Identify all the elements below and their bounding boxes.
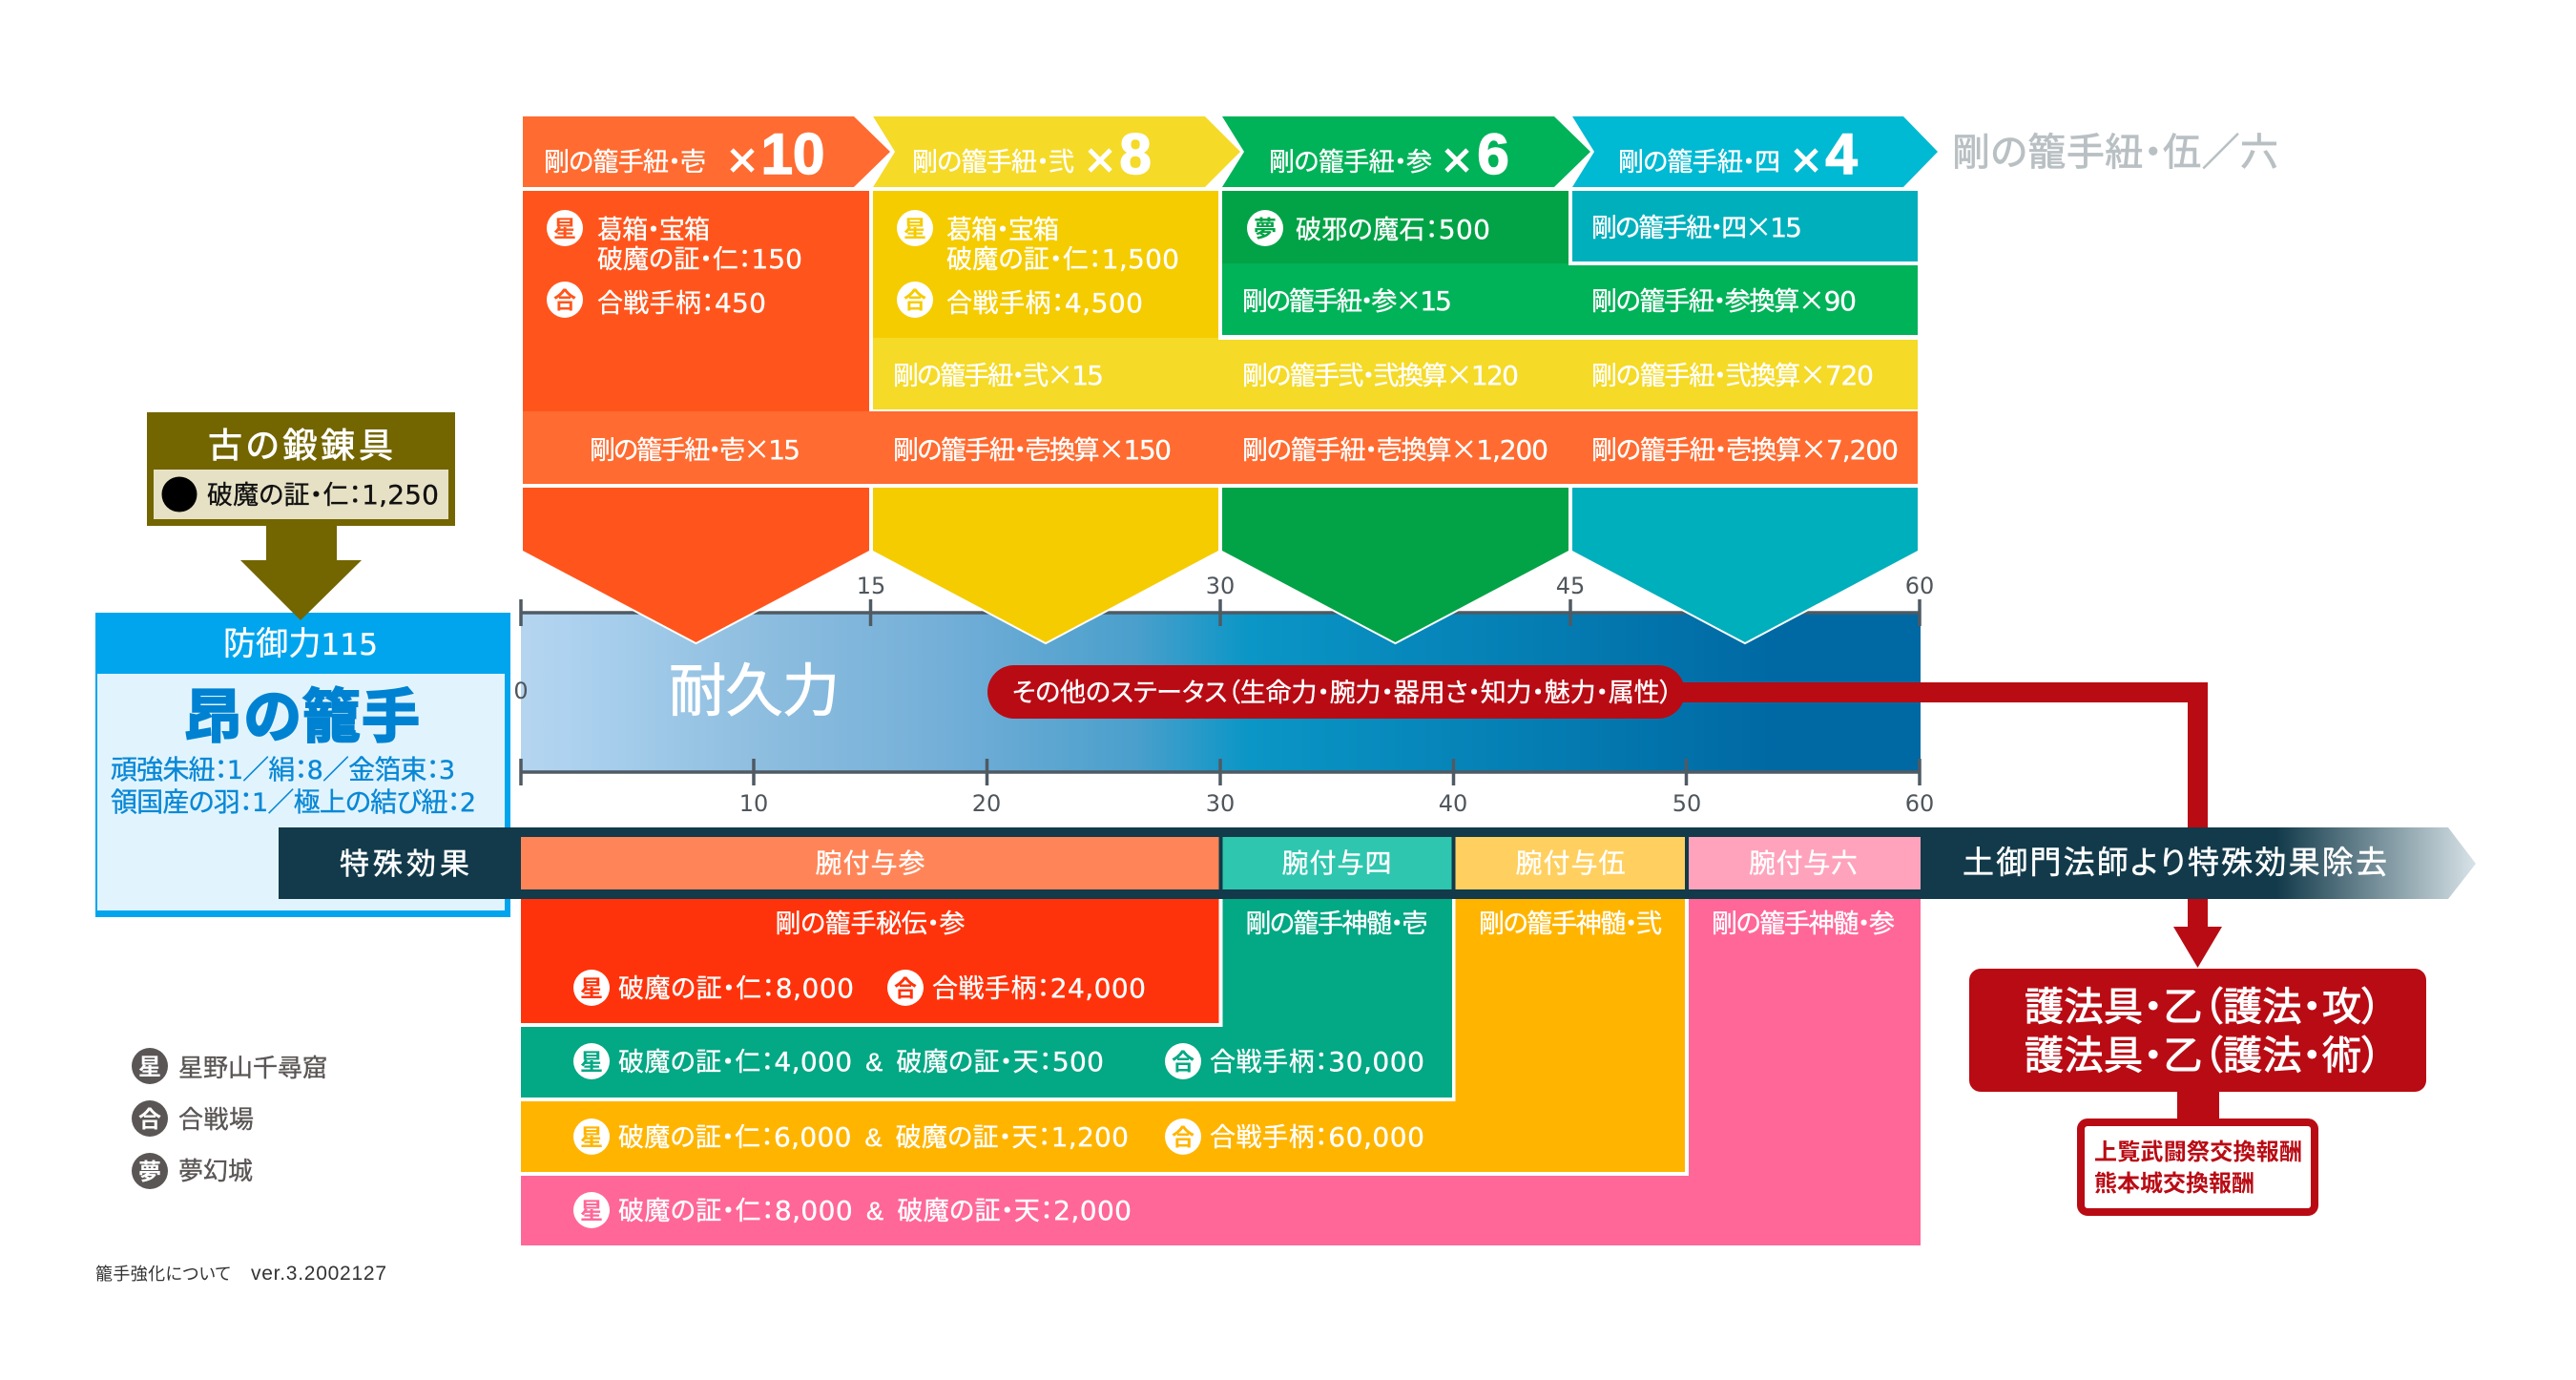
connector: to reward box — [2177, 1092, 2219, 1120]
icon: 合 — [897, 282, 933, 318]
row: 弐 conversions — [873, 338, 1918, 409]
icon: 夢 — [1247, 210, 1283, 246]
row: 参 conversions: 剛の籠手紐・参×15 — [1242, 281, 1452, 319]
cell: 腕付与伍: 腕付与伍 — [1515, 848, 1626, 878]
cost text: 合戦手柄：60,000 — [1210, 1121, 1424, 1153]
panel: 護法具・乙: 護法具・乙（護法・攻） — [2025, 985, 2381, 1029]
header arrow: 壱 ×10: 剛の籠手紐・壱 — [544, 148, 706, 177]
row: 壱 conversions — [523, 411, 1918, 484]
cell: 腕付与参: 腕付与参 — [815, 848, 925, 878]
icon: black circle — [162, 477, 197, 512]
bottom axis 10-60 — [521, 759, 1920, 785]
legend: 星野山千尋窟: 星 — [138, 1055, 161, 1080]
panel: red 秘伝・参 — [521, 899, 1219, 1023]
header arrow: 壱 ×10: 10 — [761, 122, 824, 186]
axis label 15: 15 — [857, 573, 885, 599]
heading: 剛の籠手紐 伍/六: 剛の籠手紐・伍／六 — [1952, 132, 2278, 174]
pill: other status — [987, 665, 1685, 719]
legend: 合戦場: 合戦場 — [178, 1105, 254, 1134]
chart: durability gradient bar — [513, 573, 1934, 817]
icon: 星 — [573, 1119, 610, 1155]
cost text: 合戦手柄：24,000 — [932, 972, 1146, 1004]
axis label 45: 45 — [1556, 573, 1585, 599]
text: 破邪の魔石 500: 破邪の魔石：500 — [1296, 214, 1490, 245]
icon: 夢: 夢 — [1254, 217, 1277, 242]
header arrow: 弐 ×8 — [855, 116, 1240, 189]
axis label 10: 10 — [739, 790, 768, 817]
materials line 2: 領国産の羽：1／極上の結び紐：2 — [111, 787, 476, 818]
chevron: 壱 — [523, 488, 869, 642]
header arrow: 参 ×6 — [1222, 116, 1590, 189]
row: 弐 conversions: 剛の籠手紐・弐換算×720 — [1591, 355, 1874, 393]
panel: rewards — [2081, 1122, 2315, 1212]
cost text: 破魔の証・仁：1,250 — [207, 479, 439, 511]
panel: 壱 sources — [523, 191, 869, 412]
icon: 合: 合 — [904, 288, 926, 314]
row: 壱 conversions: 剛の籠手紐・壱換算×1,200 — [1242, 429, 1548, 468]
cost text: 合戦手柄：30,000 — [1210, 1046, 1424, 1077]
icon: 合: 合 — [553, 288, 576, 314]
axis label 20: 20 — [972, 790, 1001, 817]
row: 参 conversions: 剛の籠手紐・参換算×90 — [1591, 281, 1857, 319]
icon: 星 — [897, 210, 933, 246]
header arrow: 参 ×6: × — [1442, 132, 1472, 189]
band: 特殊効果 — [279, 827, 2476, 899]
panel: 四 ×15 — [1572, 191, 1918, 261]
axis label 60: 60 — [1905, 573, 1934, 599]
icon: 星 — [573, 1043, 610, 1079]
panel: 護法具・乙: 護法具・乙（護法・術） — [2025, 1034, 2381, 1077]
chevron: 四 — [1572, 488, 1918, 642]
cell: 腕付与六 — [1689, 837, 1921, 889]
icon: 星: 星 — [553, 217, 576, 242]
cell: 腕付与四 — [1223, 837, 1452, 889]
header arrow: 弐 ×8: × — [1085, 132, 1115, 189]
legend: 夢幻城 — [132, 1153, 253, 1189]
text: 合戦手柄 450: 合戦手柄：450 — [597, 287, 766, 319]
header arrow: 参 ×6: 6 — [1477, 122, 1509, 186]
panel: amber 神髄・弐: 剛の籠手神髄・弐 — [1479, 910, 1662, 938]
panel: red 秘伝・参: 剛の籠手秘伝・参 — [775, 910, 966, 938]
icon: 合: 合 — [894, 976, 917, 1002]
axis label 50: 50 — [1672, 790, 1701, 817]
icon: 星 — [573, 970, 610, 1006]
icon: 合 — [1165, 1043, 1201, 1079]
header arrow: 四 ×4: 4 — [1825, 122, 1858, 186]
panel: teal 神髄・壱: 剛の籠手神髄・壱 — [1246, 910, 1427, 938]
top axis 0-60 — [521, 599, 1920, 626]
icon: 星: 星 — [580, 1199, 603, 1224]
row: 弐 conversions: 剛の籠手弐・弐換算×120 — [1242, 355, 1519, 393]
label: 耐久力: 耐久力 — [669, 659, 840, 723]
legend: 夢幻城: 夢幻城 — [178, 1157, 253, 1185]
panel: 昂の籠手 — [95, 613, 510, 917]
icon: 星: 星 — [580, 1050, 603, 1076]
text: 破魔の証・仁 1,500: 破魔の証・仁：1,500 — [946, 243, 1179, 275]
arrow: red connector to 護法具 — [1679, 682, 2222, 968]
cost text: 破魔の証・仁：6,000 & 破魔の証・天：1,200 — [618, 1121, 1129, 1153]
axis label 0: 0 — [513, 678, 529, 704]
chevron: 弐 — [873, 488, 1218, 642]
panel: 古の鍛錬具: 古の鍛錬具 — [208, 426, 393, 465]
icon: 星 — [573, 1192, 610, 1228]
panel: 護法具・乙 — [1969, 969, 2426, 1092]
arrow: olive down arrow — [240, 520, 362, 620]
footer: version: ver.3.2002127 — [251, 1263, 386, 1285]
panel: amber 神髄・弐 — [521, 899, 1685, 1172]
cell: 腕付与参 — [521, 837, 1219, 889]
row: 壱 conversions: 剛の籠手紐・壱×15 — [590, 429, 800, 468]
label: 土御門法師より特殊効果除去: 土御門法師より特殊効果除去 — [1963, 845, 2387, 880]
text: 破魔の証・仁 150: 破魔の証・仁：150 — [597, 243, 802, 275]
header arrow: 弐 ×8: 8 — [1119, 122, 1152, 186]
icon: 星: 星 — [580, 976, 603, 1002]
text: 合戦手柄 4,500: 合戦手柄：4,500 — [946, 287, 1143, 319]
cell: 腕付与四: 腕付与四 — [1282, 848, 1391, 878]
row: 弐 conversions: 剛の籠手紐・弐×15 — [893, 355, 1104, 393]
row: 壱 conversions: 剛の籠手紐・壱換算×150 — [893, 429, 1172, 468]
footer: version: 籠手強化について — [95, 1265, 231, 1284]
icon: 合: 合 — [1172, 1050, 1195, 1076]
panel: rewards: 上覧武闘祭交換報酬 — [2094, 1140, 2302, 1165]
axis label 30: 30 — [1206, 573, 1235, 599]
header arrow: 参 ×6: 剛の籠手紐・参 — [1269, 148, 1432, 177]
panel: pink 神髄・参 — [521, 899, 1921, 1245]
icon: 星 — [547, 210, 583, 246]
panel: rewards: 熊本城交換報酬 — [2094, 1170, 2254, 1197]
pill: other status: その他のステータス（生命力・腕力・器用さ・知力・魅力・属性） — [1012, 679, 1672, 707]
panel: 四 ×15: 剛の籠手紐・四×15 — [1591, 207, 1802, 245]
footer: version — [95, 1263, 386, 1285]
cost text: 破魔の証・仁：8,000 & 破魔の証・天：2,000 — [618, 1195, 1132, 1226]
legend: 星野山千尋窟: 星野山千尋窟 — [178, 1054, 327, 1082]
label: 特殊効果: 特殊効果 — [340, 847, 469, 881]
cost text: 破魔の証・仁：4,000 & 破魔の証・天：500 — [618, 1046, 1104, 1077]
header arrow: 壱 ×10: × — [727, 132, 758, 189]
icon: 星: 星 — [904, 217, 926, 242]
cell: 腕付与伍 — [1456, 837, 1685, 889]
panel: pink 神髄・参: 剛の籠手神髄・参 — [1712, 910, 1895, 938]
icon: 合 — [887, 970, 924, 1006]
text: 防御力115: 防御力115 — [223, 626, 378, 662]
icon: 合: 合 — [1172, 1125, 1195, 1151]
cost text: 破魔の証・仁：8,000 — [618, 972, 854, 1004]
row: 壱 conversions: 剛の籠手紐・壱換算×7,200 — [1591, 429, 1899, 468]
panel: 参 sources — [1222, 191, 1568, 264]
materials line 1: 頑強朱紐：1／絹：8／金箔束：3 — [111, 755, 455, 785]
icon: 合 — [1165, 1119, 1201, 1155]
header arrow: 壱 ×10 — [523, 116, 890, 189]
legend: 合戦場 — [132, 1100, 254, 1137]
text: 葛箱・宝箱: 葛箱・宝箱 — [946, 216, 1059, 244]
cost box — [154, 470, 448, 519]
axis label 60: 60 — [1905, 790, 1934, 817]
text: 葛箱・宝箱: 葛箱・宝箱 — [597, 216, 710, 244]
header arrow: 四 ×4 — [1572, 116, 1938, 189]
row: 参 conversions — [1222, 263, 1918, 335]
axis label 40: 40 — [1439, 790, 1467, 817]
legend: 合戦場: 合 — [138, 1107, 161, 1133]
panel: 弐 sources — [873, 191, 1218, 338]
legend: 星野山千尋窟 — [132, 1048, 327, 1084]
header arrow: 四 ×4: 剛の籠手紐・四 — [1618, 148, 1780, 177]
header arrow: 四 ×4: × — [1791, 132, 1821, 189]
icon: 合 — [547, 282, 583, 318]
axis label 30: 30 — [1206, 790, 1235, 817]
icon: 星: 星 — [580, 1125, 603, 1151]
chevron: 参 — [1222, 488, 1568, 642]
panel: 古の鍛錬具 — [147, 412, 455, 526]
title: 昂の籠手: 昂の籠手 — [184, 684, 420, 749]
legend: 夢幻城: 夢 — [138, 1160, 161, 1185]
panel: teal 神髄・壱 — [521, 899, 1452, 1098]
cell: 腕付与六: 腕付与六 — [1749, 848, 1858, 878]
header arrow: 弐 ×8: 剛の籠手紐・弐 — [912, 148, 1074, 177]
